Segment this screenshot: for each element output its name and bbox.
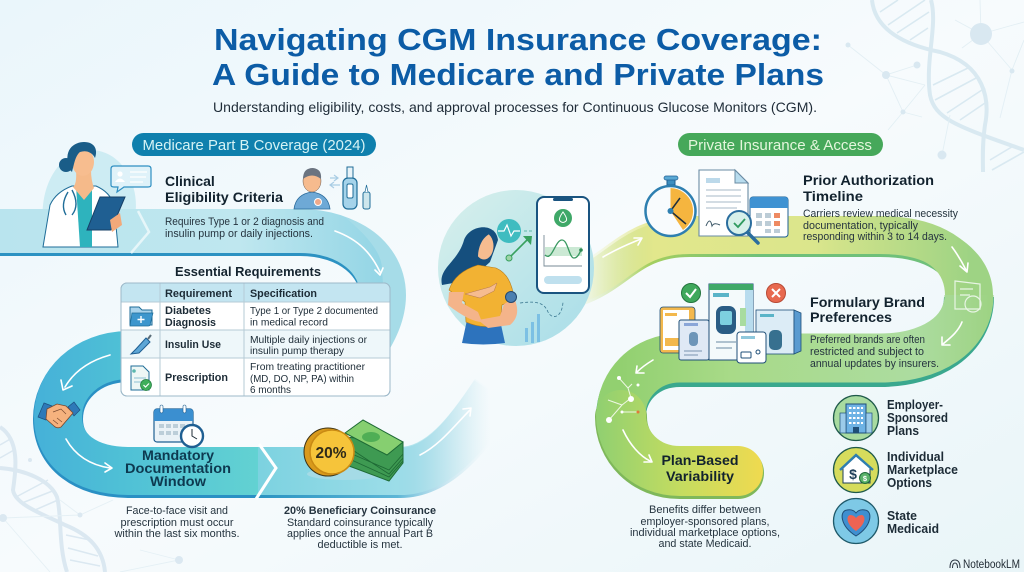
box: small white <box>737 332 766 363</box>
title: Navigating CGM Insurance Coverage: <box>214 22 822 57</box>
ribbon: Medicare pathway <box>0 150 495 499</box>
icon: 20 percent coin: 20% <box>315 445 347 462</box>
text: prior authorization description: documentation, typically <box>803 220 919 232</box>
title: A Guide to Medicare and Private Plans <box>212 57 824 92</box>
icon: calendar with clock <box>154 405 203 447</box>
icon: Medicaid heart <box>834 498 878 544</box>
text: documentation description: Face-to-face visit and <box>126 505 228 517</box>
icon: marketplace house: $ <box>849 466 857 482</box>
label: Employer-Sponsored Plans: Plans <box>887 424 919 438</box>
text: coinsurance description: Standard coinsurance typically <box>287 517 434 529</box>
text: prior authorization description: responding within 3 to 14 days. <box>803 231 947 243</box>
label: State Medicaid <box>887 509 939 536</box>
table header: Requirement <box>165 288 232 300</box>
box: small blue left <box>679 320 709 360</box>
text: plan variability description: individual marketplace options, <box>630 527 780 539</box>
arrows on ribbons <box>61 231 968 472</box>
text: formulary description: annual updates by insurers. <box>810 358 939 370</box>
row: prescription: 6 months <box>250 385 291 396</box>
heading: Plan-Based Variability: Variability <box>666 468 734 484</box>
text: coinsurance description: deductible is met. <box>318 539 402 551</box>
heading: Prior Authorization Timeline: Timeline <box>803 188 863 204</box>
row: insulin use: Multiple daily injections or <box>250 335 368 346</box>
icon: network lines on ribbon <box>606 376 640 423</box>
text: plan variability description: and state Medicaid. <box>658 538 752 550</box>
text: documentation description <box>113 505 240 540</box>
table header <box>165 288 317 300</box>
heading: Formulary Brand Preferences <box>810 294 925 325</box>
text: plan variability description: Benefits differ between <box>649 504 761 516</box>
label: Individual Marketplace Options: Options <box>887 476 932 490</box>
chart bars <box>525 314 540 343</box>
icon: 20 percent coin <box>304 428 354 476</box>
table: requirements <box>121 283 390 396</box>
text: coinsurance description <box>284 505 436 551</box>
heading: Prior Authorization Timeline <box>803 172 934 204</box>
heading: Clinical Eligibility Criteria <box>165 173 283 205</box>
text: coinsurance description: applies once the annual Part B <box>287 528 433 540</box>
icon: handshake <box>38 402 80 428</box>
text: plan variability description: employer-sponsored plans, <box>640 516 770 528</box>
heading: Formulary Brand Preferences: Formulary Brand <box>810 294 925 310</box>
pill: Medicare Part B Coverage <box>132 133 376 156</box>
icon: patient with devices <box>294 167 370 209</box>
row: diabetes diagnosis: Diagnosis <box>165 317 216 329</box>
text: prior authorization description: Carriers review medical necessity <box>803 208 959 220</box>
icon: marketplace house <box>834 448 878 492</box>
heading: Plan-Based Variability: Plan-Based <box>662 452 738 468</box>
pill: Medicare Part B Coverage: Medicare Part B Coverage (2024) <box>142 137 366 154</box>
icon: employer building <box>834 396 878 440</box>
label: State Medicaid: Medicaid <box>887 522 939 536</box>
heading: Clinical Eligibility Criteria: Eligibility Criteria <box>165 189 283 205</box>
chevron: top ribbon <box>131 211 149 253</box>
decoration: DNA helix top right <box>846 0 1024 172</box>
icon: stack of money <box>307 420 403 481</box>
icon: speech bubble <box>111 166 151 192</box>
label: Employer-Sponsored Plans: Employer- <box>887 398 943 412</box>
icon: phone with glucose chart <box>537 197 589 293</box>
row: prescription: From treating practitioner <box>250 362 366 373</box>
text: coinsurance description: 20% Beneficiary Coinsurance <box>284 505 436 517</box>
table header: Specification <box>250 288 317 300</box>
illustration: woman with CGM and phone <box>438 190 594 346</box>
icon: CGM sensor <box>506 292 516 302</box>
row: insulin use <box>131 335 368 357</box>
heading: Essential Requirements: Essential Requirements <box>175 265 321 279</box>
icon: trend arrow <box>506 236 532 261</box>
text: documentation description: within the last six months. <box>113 528 240 540</box>
text: formulary description: Preferred brands are often <box>810 334 925 346</box>
icon: cross badge <box>766 284 786 302</box>
text: prior authorization description <box>803 208 959 243</box>
label: Employer-Sponsored Plans: Sponsored <box>887 411 948 425</box>
decoration: DNA helix bottom left <box>0 427 183 572</box>
heading: Mandatory Documentation Window: Window <box>150 473 206 489</box>
text: plan variability description <box>630 504 780 550</box>
chevron: left ribbon <box>256 444 276 499</box>
box: blue right <box>756 310 801 354</box>
ribbon: private insurance pathway <box>575 217 993 473</box>
text: eligibility description: insulin pump or daily injections. <box>165 228 313 240</box>
label: Individual Marketplace Options: Marketplace <box>887 463 958 477</box>
text: formulary description <box>810 334 939 370</box>
text: eligibility description <box>165 216 324 240</box>
label: Individual Marketplace Options <box>887 450 958 490</box>
heading: Formulary Brand Preferences: Preferences <box>810 309 892 325</box>
heading: Mandatory Documentation Window: Documentation <box>125 460 231 476</box>
box: tall centre <box>709 284 753 360</box>
row: prescription <box>131 362 366 396</box>
row: insulin use: Insulin Use <box>165 339 221 351</box>
icon: check badge <box>682 284 700 302</box>
heading: Plan-Based Variability <box>662 452 738 484</box>
row: prescription: (MD, DO, NP, PA) within <box>250 374 354 385</box>
row: diabetes diagnosis: Type 1 or Type 2 documented <box>250 306 378 317</box>
icon: calendar <box>750 197 788 237</box>
icon: doctor with tablet <box>43 142 125 247</box>
text: eligibility description: Requires Type 1 or 2 diagnosis and <box>165 216 324 228</box>
row: diabetes diagnosis <box>130 305 378 329</box>
row: diabetes diagnosis: Diabetes <box>165 305 211 317</box>
icon: CGM product boxes <box>660 284 801 363</box>
heading: Prior Authorization Timeline: Prior Authorization <box>803 172 934 188</box>
label: State Medicaid: State <box>887 509 917 523</box>
icon: marketplace house: $ <box>863 474 868 483</box>
text: formulary description: restricted and subject to <box>810 346 924 358</box>
heading: Mandatory Documentation Window: Mandatory <box>142 447 214 463</box>
label: Individual Marketplace Options: Individual <box>887 450 944 464</box>
title <box>212 22 824 92</box>
row: diabetes diagnosis: in medical record <box>250 318 328 328</box>
subtitle: Understanding eligibility, costs, and approval processes for Continuous Glucose Monitors (CGM). <box>213 99 817 115</box>
pill: Private Insurance & Access <box>678 133 883 156</box>
pill: Private Insurance & Access: Private Insurance & Access <box>688 137 872 154</box>
icon: document with signature <box>699 170 748 236</box>
row: prescription: Prescription <box>165 372 228 384</box>
icon: stopwatch <box>646 176 696 236</box>
heading: Clinical Eligibility Criteria: Clinical <box>165 173 215 189</box>
icon: magnifier <box>727 211 758 243</box>
label: Employer-Sponsored Plans <box>887 398 948 438</box>
icon: faded document on ribbon <box>955 281 981 312</box>
text: documentation description: prescription must occur <box>120 517 234 529</box>
row: insulin use: insulin pump therapy <box>250 346 345 357</box>
box: orange <box>660 307 695 353</box>
heading: Mandatory Documentation Window <box>125 447 231 489</box>
icon: pulse badge <box>483 219 534 243</box>
